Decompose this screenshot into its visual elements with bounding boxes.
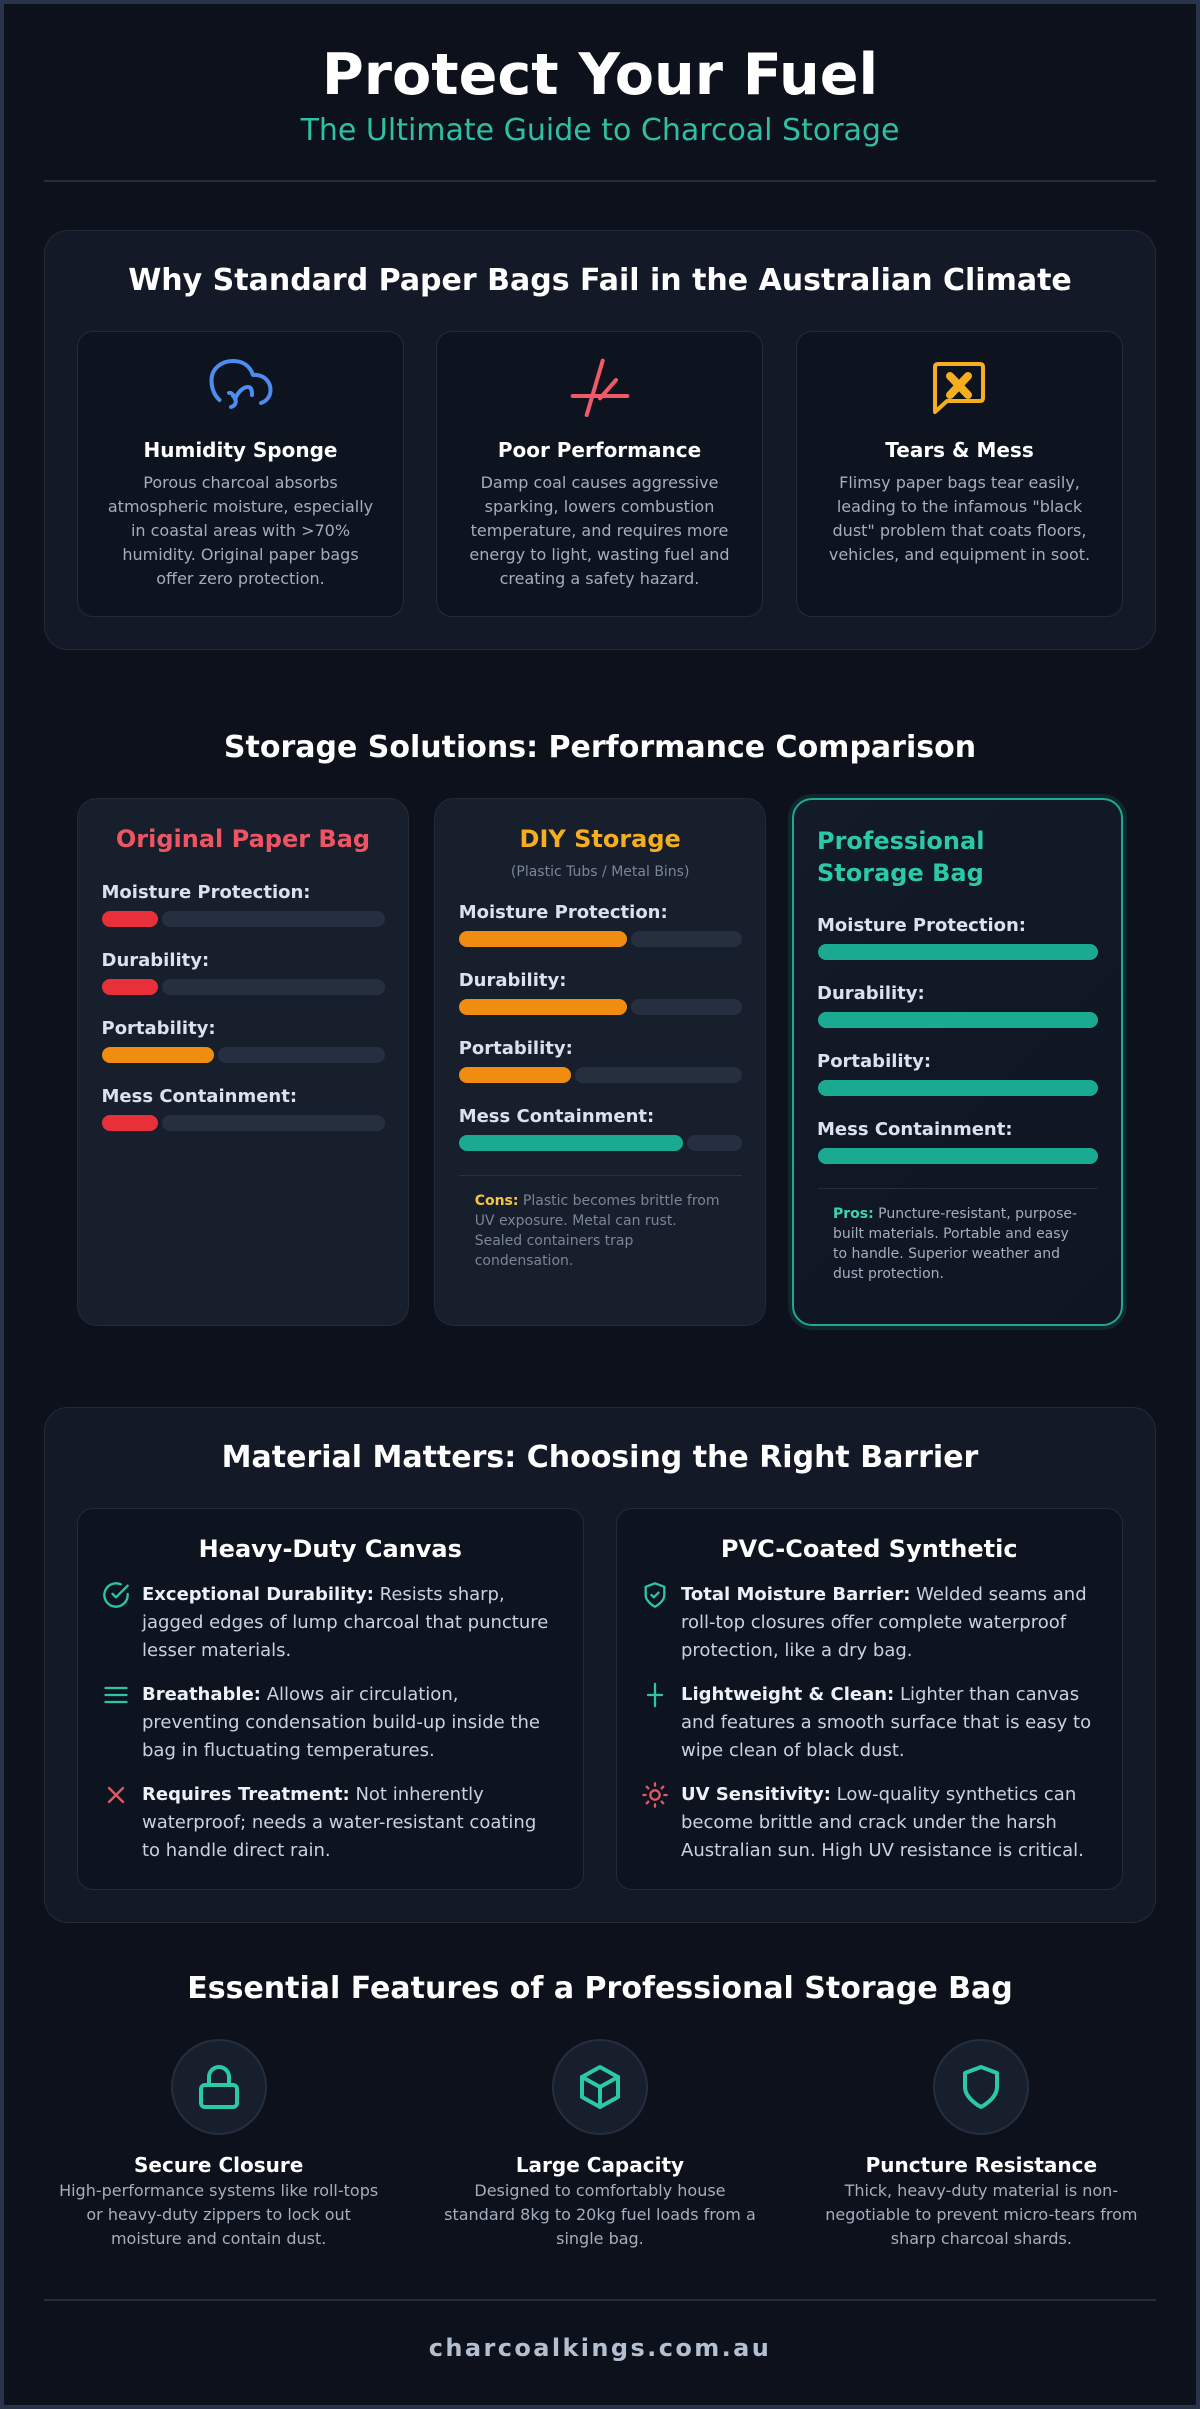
text: UV sensitivity: become brittle and crack under the harsh: [681, 1812, 1057, 1833]
text: secure closure: High-performance systems like roll-tops: [59, 2181, 378, 2200]
icon: menu lines: [104, 1686, 128, 1704]
panel: material matters: [44, 1407, 1156, 1923]
text: UV sensitivity: Australian sun. High UV resistance is critical.: [681, 1840, 1084, 1861]
pros note: Pros: Puncture-resistant, purpose-: [833, 1206, 1077, 1222]
text: poor performance: energy to light, wasting fuel and: [469, 545, 730, 564]
card: heavy-duty canvas: [77, 1508, 584, 1890]
panel: DIY storage: [434, 798, 766, 1326]
bar: durability: [818, 1012, 1098, 1028]
bar: durability: [102, 979, 385, 995]
text: humidity sponge: humidity. Original paper bags: [122, 545, 359, 564]
title: professional storage bag: Professional: [817, 827, 984, 855]
header: [300, 42, 899, 148]
text: poor performance: Damp coal causes aggressive: [481, 473, 718, 492]
feature: puncture resistance: [825, 2039, 1137, 2248]
metric: portability: Portability:: [102, 1018, 216, 1039]
text: tears and mess: vehicles, and equipment in soot.: [829, 545, 1090, 564]
metric: moisture protection: Moisture Protection:: [102, 882, 311, 903]
text: total moisture barrier: [681, 1584, 1087, 1661]
card: PVC-coated synthetic: [616, 1508, 1122, 1890]
pros note: [833, 1206, 1077, 1282]
text: poor performance: temperature, and requires more: [471, 521, 728, 540]
text: puncture resistance: sharp charcoal shards.: [891, 2229, 1072, 2248]
text: tears and mess: leading to the infamous "black: [837, 497, 1082, 516]
bar: durability: [459, 999, 742, 1015]
pros note: built materials. Portable and easy: [833, 1226, 1069, 1242]
icon: cross: [108, 1786, 124, 1804]
text: exceptional durability: Exceptional Durability: Resists sharp,: [142, 1584, 505, 1605]
icon: cloud: [210, 359, 272, 409]
metric: moisture protection: Moisture Protection:: [817, 915, 1026, 936]
metric: durability: Durability:: [817, 983, 925, 1004]
text: humidity sponge: Porous charcoal absorbs: [143, 473, 338, 492]
text: tears and mess: dust" problem that coats floors,: [833, 521, 1086, 540]
text: large capacity: [444, 2181, 756, 2248]
metric: portability: Portability:: [459, 1038, 573, 1059]
cons note: [475, 1193, 719, 1269]
bar: mess containment: [459, 1135, 742, 1151]
icon: shield check: [644, 1582, 666, 1608]
heading: storage solutions: Storage Solutions: Performance Comparison: [224, 730, 976, 765]
panel: original paper bag: [76, 798, 409, 1326]
text: breathable: Breathable: Allows air circulation,: [142, 1684, 458, 1705]
text: tears and mess: Flimsy paper bags tear easily,: [839, 473, 1080, 492]
card: tears and mess: [796, 331, 1123, 617]
icon: shield: [933, 2039, 1029, 2135]
text: large capacity: single bag.: [556, 2229, 644, 2248]
panel: professional storage bag: [792, 798, 1123, 1326]
cons note: Sealed containers trap: [475, 1233, 633, 1249]
metric: mess containment: Mess Containment:: [102, 1086, 297, 1107]
subtitle: The Ultimate Guide to Charcoal Storage: [301, 113, 899, 148]
text: lightweight and clean: wipe clean of black dust.: [681, 1740, 905, 1761]
title: humidity sponge: Humidity Sponge: [144, 438, 337, 462]
metric: durability: Durability:: [459, 970, 566, 991]
title: secure closure: Secure Closure: [134, 2153, 303, 2177]
metric: mess containment: Mess Containment:: [817, 1119, 1013, 1140]
text: requires treatment: Requires Treatment: Not inherently: [142, 1784, 484, 1805]
text: humidity sponge: atmospheric moisture, especially: [108, 497, 373, 516]
title: DIY storage: DIY Storage: [520, 825, 681, 853]
icon: check circle: [103, 1582, 129, 1608]
text: secure closure: moisture and contain dust.: [111, 2229, 326, 2248]
text: breathable: preventing condensation build-up inside the: [142, 1712, 540, 1733]
text: lightweight and clean: and features a smooth surface that is easy to: [681, 1712, 1091, 1733]
text: requires treatment: waterproof; needs a water-resistant coating: [142, 1812, 536, 1833]
text: exceptional durability: lesser materials.: [142, 1640, 291, 1661]
text: lightweight and clean: [681, 1684, 1091, 1761]
text: lightweight and clean: Lightweight & Clean: Lighter than canvas: [681, 1684, 1079, 1705]
text: UV sensitivity: [681, 1784, 1084, 1861]
heading: essential features: Essential Features of a Professional Storage Bag: [187, 1971, 1013, 2006]
metric: durability: Durability:: [102, 950, 209, 971]
card: humidity sponge: [77, 331, 404, 617]
text: total moisture barrier: Total Moisture Barrier: Welded seams and: [681, 1584, 1087, 1605]
text: breathable: [142, 1684, 540, 1761]
metric: portability: Portability:: [817, 1051, 931, 1072]
cons note: Cons: Plastic becomes brittle from: [475, 1193, 719, 1209]
pros note: to handle. Superior weather and: [833, 1246, 1060, 1262]
text: exceptional durability: jagged edges of lump charcoal that puncture: [142, 1612, 548, 1633]
title: puncture resistance: Puncture Resistance: [866, 2153, 1097, 2177]
bar: portability: [459, 1067, 742, 1083]
title: professional storage bag: [817, 827, 984, 887]
bar: moisture protection: [459, 931, 742, 947]
title: PVC-coated synthetic: PVC-Coated Synthetic: [721, 1535, 1018, 1563]
cons note: condensation.: [475, 1253, 573, 1269]
text: tears and mess: [829, 473, 1090, 564]
icon: box: [552, 2039, 648, 2135]
title: professional storage bag: Storage Bag: [817, 859, 984, 887]
bar: moisture protection: [102, 911, 385, 927]
text: humidity sponge: offer zero protection.: [156, 569, 325, 588]
bar: mess containment: [102, 1115, 385, 1131]
text: large capacity: standard 8kg to 20kg fuel loads from a: [444, 2205, 756, 2224]
feature: large capacity: [444, 2039, 756, 2248]
bar: portability: [818, 1080, 1098, 1096]
text: secure closure: [59, 2181, 378, 2248]
bar: portability: [102, 1047, 385, 1063]
title: original paper bag: Original Paper Bag: [116, 825, 370, 853]
footer: charcoalkings.com.au: [429, 2334, 771, 2362]
text: requires treatment: to handle direct rain.: [142, 1840, 331, 1861]
panel: why paper bags fail: [44, 230, 1156, 650]
title: Protect Your Fuel: [322, 42, 878, 108]
bar: moisture protection: [818, 944, 1098, 960]
heading: material matters: Material Matters: Choosing the Right Barrier: [222, 1440, 978, 1475]
text: humidity sponge: [108, 473, 373, 588]
text: puncture resistance: [825, 2181, 1137, 2248]
metric: mess containment: Mess Containment:: [459, 1106, 654, 1127]
metric: moisture protection: Moisture Protection:: [459, 902, 668, 923]
title: large capacity: Large Capacity: [516, 2153, 684, 2177]
title: heavy-duty canvas: Heavy-Duty Canvas: [199, 1535, 462, 1563]
title: poor performance: Poor Performance: [498, 438, 701, 462]
text: poor performance: sparking, lowers combustion: [485, 497, 714, 516]
icon: padlock: [171, 2039, 267, 2135]
icon: sun: [642, 1782, 668, 1808]
text: total moisture barrier: protection, like a dry bag.: [681, 1640, 913, 1661]
feature: secure closure: [59, 2039, 378, 2248]
icon: sparks: [570, 358, 630, 417]
text: breathable: bag in fluctuating temperatures.: [142, 1740, 435, 1761]
pros note: dust protection.: [833, 1266, 944, 1282]
cons note: UV exposure. Metal can rust.: [475, 1213, 677, 1229]
text: UV sensitivity: UV Sensitivity: Low-quality synthetics can: [681, 1784, 1076, 1805]
icon: torn speech bubble: [933, 362, 985, 414]
text: secure closure: or heavy-duty zippers to lock out: [86, 2205, 351, 2224]
title: tears and mess: Tears & Mess: [885, 438, 1034, 462]
text: total moisture barrier: roll-top closures offer complete waterproof: [681, 1612, 1066, 1633]
text: poor performance: creating a safety hazard.: [500, 569, 699, 588]
text: exceptional durability: [142, 1584, 548, 1661]
text: requires treatment: [142, 1784, 536, 1861]
icon: plus: [646, 1682, 664, 1708]
text: large capacity: Designed to comfortably house: [474, 2181, 726, 2200]
text: puncture resistance: negotiable to prevent micro-tears from: [825, 2205, 1137, 2224]
subtitle: DIY storage: (Plastic Tubs / Metal Bins): [511, 864, 689, 880]
text: poor performance: [469, 473, 730, 588]
text: humidity sponge: in coastal areas with >70%: [131, 521, 350, 540]
text: puncture resistance: Thick, heavy-duty material is non-: [845, 2181, 1118, 2200]
heading: why paper bags fail: Why Standard Paper Bags Fail in the Australian Climate: [128, 263, 1072, 298]
card: poor performance: [436, 331, 763, 617]
bar: mess containment: [818, 1148, 1098, 1164]
